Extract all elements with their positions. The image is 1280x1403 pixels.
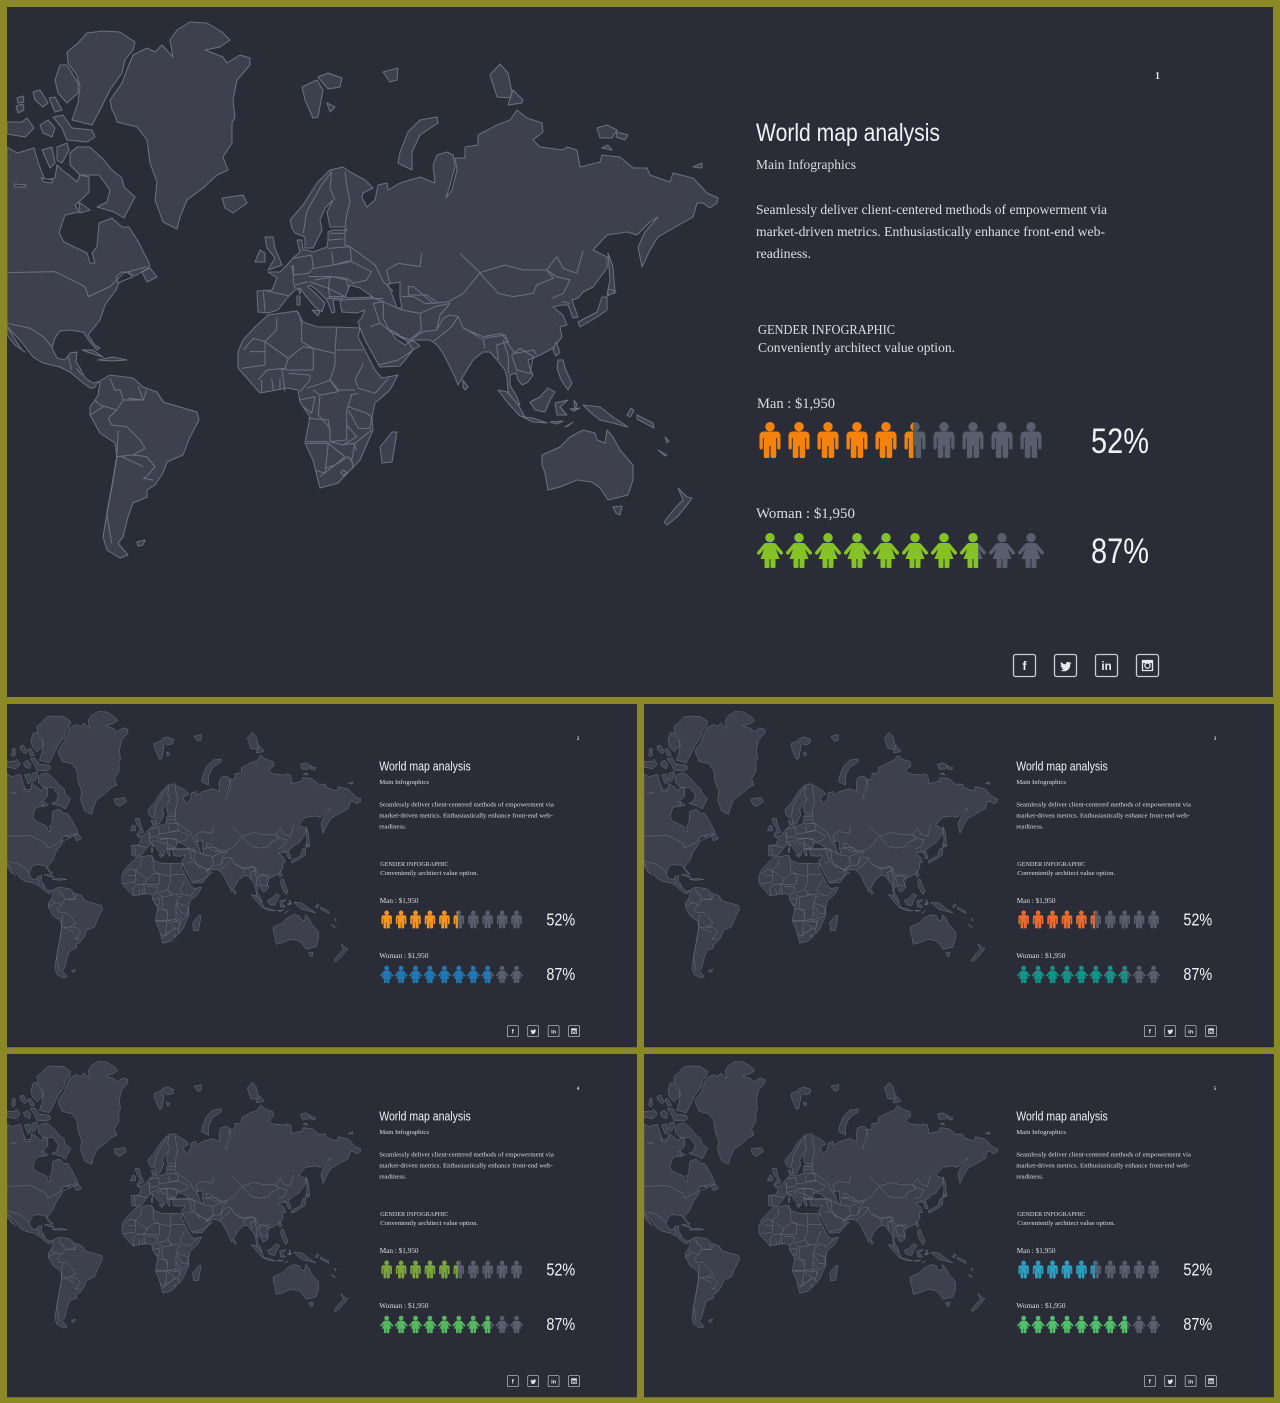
subtitle: Main Infographics (1016, 779, 1066, 786)
gender heading: Conveniently architect value option. (380, 870, 479, 877)
panel background (7, 1054, 637, 1397)
subtitle: Main Infographics (756, 157, 856, 172)
man percentage: 52% (1183, 1259, 1212, 1279)
social icons: in (551, 1379, 557, 1385)
man label: Man : $1,950 (380, 897, 419, 905)
panel: slide 3 (644, 704, 1274, 1047)
title: World map analysis (756, 119, 940, 147)
panel: slide 2 (7, 704, 637, 1047)
description: readiness. (379, 1173, 407, 1180)
social icons (1014, 654, 1158, 676)
panel: main slide 1 (7, 7, 1273, 697)
social icons (1144, 1026, 1216, 1037)
social icons: in (1188, 1029, 1194, 1035)
gender heading: GENDER INFOGRAPHIC (380, 861, 449, 868)
panel: slide 4 (7, 1054, 637, 1397)
title: World map analysis (379, 1110, 471, 1124)
slide number: 1 (1155, 71, 1160, 82)
woman label: Woman : $1,950 (379, 1302, 429, 1310)
slide number: 5 (1214, 1087, 1217, 1092)
description: Seamlessly deliver client-centered methods of empowerment via (1016, 1152, 1191, 1159)
woman percentage: 87% (1183, 1314, 1212, 1334)
description: market-driven metrics. Enthusiastically enhance front-end web- (756, 224, 1106, 239)
description (379, 1152, 554, 1180)
description (379, 802, 554, 830)
description: readiness. (756, 246, 811, 261)
title: World map analysis (1016, 1110, 1108, 1124)
woman percentage: 87% (1091, 532, 1149, 571)
description: Seamlessly deliver client-centered methods of empowerment via (1016, 802, 1191, 809)
gender heading (380, 861, 479, 877)
man percentage: 52% (546, 1259, 575, 1279)
woman label: Woman : $1,950 (756, 506, 855, 522)
title: World map analysis (379, 760, 471, 774)
social icons: f (1022, 659, 1028, 673)
man percentage: 52% (546, 909, 575, 929)
description (1016, 802, 1191, 830)
description: market-driven metrics. Enthusiastically enhance front-end web- (1016, 1162, 1190, 1169)
gender heading (380, 1211, 479, 1227)
gender heading: GENDER INFOGRAPHIC (380, 1211, 449, 1218)
world map (7, 711, 361, 978)
social icons (1144, 1376, 1216, 1387)
social icons (507, 1376, 579, 1387)
panel background (644, 1054, 1274, 1397)
gender heading (1017, 861, 1116, 877)
gender heading: GENDER INFOGRAPHIC (1017, 861, 1086, 868)
woman percentage: 87% (546, 964, 575, 984)
world map (7, 22, 718, 558)
man label: Man : $1,950 (757, 396, 835, 412)
man label: Man : $1,950 (380, 1247, 419, 1255)
social icons: in (1101, 661, 1112, 673)
woman label: Woman : $1,950 (1016, 1302, 1066, 1310)
woman percentage: 87% (546, 1314, 575, 1334)
social icons: f (1149, 1029, 1151, 1035)
subtitle: Main Infographics (379, 1129, 429, 1136)
man percentage: 52% (1183, 909, 1212, 929)
man percentage: 52% (1091, 422, 1149, 461)
woman pictogram row (757, 533, 1044, 568)
description: readiness. (1016, 1173, 1044, 1180)
woman pictogram row (1017, 1316, 1160, 1333)
title: World map analysis (1016, 760, 1108, 774)
subtitle: Main Infographics (379, 779, 429, 786)
woman pictogram row (1017, 966, 1160, 983)
woman label: Woman : $1,950 (1016, 952, 1066, 960)
description: market-driven metrics. Enthusiastically enhance front-end web- (379, 1162, 553, 1169)
man label: Man : $1,950 (1017, 1247, 1056, 1255)
panel background (7, 7, 1273, 697)
gender heading: Conveniently architect value option. (380, 1220, 479, 1227)
description: readiness. (379, 823, 407, 830)
man pictogram row (760, 422, 1042, 458)
description (1016, 1152, 1191, 1180)
description: Seamlessly deliver client-centered methods of empowerment via (379, 1152, 554, 1159)
description: market-driven metrics. Enthusiastically enhance front-end web- (1016, 812, 1190, 819)
subtitle: Main Infographics (1016, 1129, 1066, 1136)
man pictogram row (381, 911, 522, 928)
panel background (644, 704, 1274, 1047)
description: readiness. (1016, 823, 1044, 830)
gender heading: GENDER INFOGRAPHIC (758, 322, 895, 337)
slide number: 4 (577, 1087, 580, 1092)
gender heading: Conveniently architect value option. (758, 340, 955, 355)
social icons: f (512, 1379, 514, 1385)
social icons: in (551, 1029, 557, 1035)
world map (644, 1061, 998, 1328)
man label: Man : $1,950 (1017, 897, 1056, 905)
woman label: Woman : $1,950 (379, 952, 429, 960)
social icons (507, 1026, 579, 1037)
slide number: 2 (577, 737, 580, 742)
world map (644, 711, 998, 978)
man pictogram row (381, 1261, 522, 1278)
man pictogram row (1018, 1261, 1159, 1278)
world map (7, 1061, 361, 1328)
panel background (7, 704, 637, 1047)
gender heading: Conveniently architect value option. (1017, 870, 1116, 877)
slide number: 3 (1214, 737, 1217, 742)
woman percentage: 87% (1183, 964, 1212, 984)
social icons: f (1149, 1379, 1151, 1385)
description: Seamlessly deliver client-centered methods of empowerment via (379, 802, 554, 809)
gender heading: GENDER INFOGRAPHIC (1017, 1211, 1086, 1218)
panel: slide 5 (644, 1054, 1274, 1397)
social icons: in (1188, 1379, 1194, 1385)
gender heading (758, 322, 955, 355)
description (756, 202, 1107, 261)
gender heading: Conveniently architect value option. (1017, 1220, 1116, 1227)
social icons: f (512, 1029, 514, 1035)
man pictogram row (1018, 911, 1159, 928)
description: market-driven metrics. Enthusiastically enhance front-end web- (379, 812, 553, 819)
description: Seamlessly deliver client-centered methods of empowerment via (756, 202, 1107, 217)
gender heading (1017, 1211, 1116, 1227)
woman pictogram row (380, 1316, 523, 1333)
woman pictogram row (380, 966, 523, 983)
